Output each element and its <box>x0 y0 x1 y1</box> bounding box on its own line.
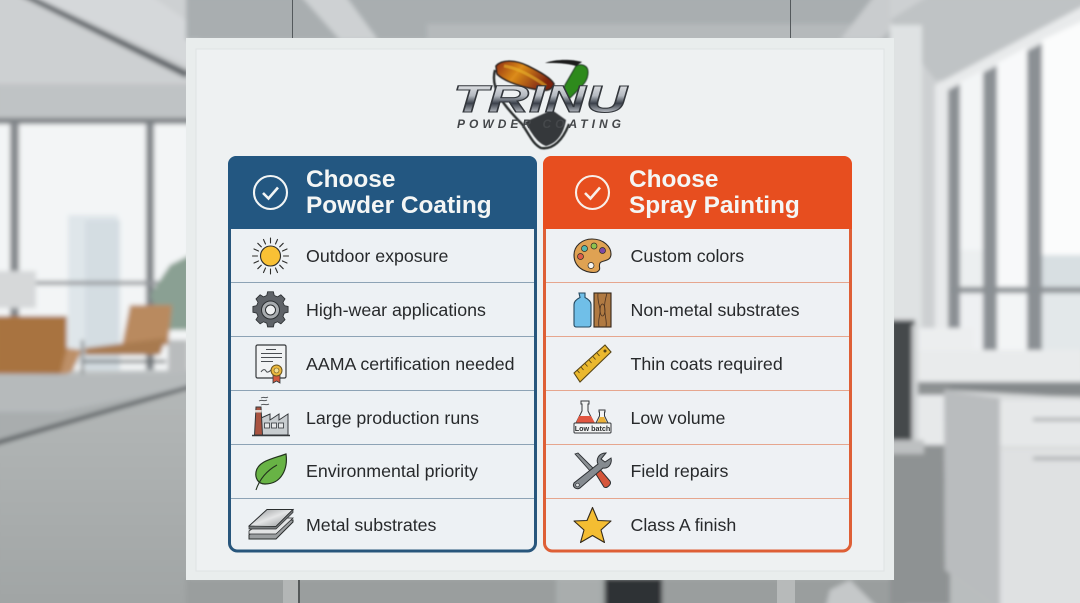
icon: star <box>574 508 611 542</box>
row: environmental priority <box>256 454 478 490</box>
icon: certificate <box>256 345 286 383</box>
header: powder coating <box>228 156 537 229</box>
logo tagline: POWDER COATING <box>457 117 621 131</box>
label: Low volume <box>630 408 725 428</box>
icon: ruler <box>574 345 611 382</box>
label: Field repairs <box>630 461 728 481</box>
label: High-wear applications <box>306 300 486 320</box>
label: Outdoor exposure <box>306 246 448 266</box>
row: non-metal substrates <box>574 293 800 327</box>
logo wordmark: TRINU <box>453 79 629 121</box>
row: custom colors <box>574 239 744 272</box>
row: high-wear applications <box>253 292 486 327</box>
row: AAMA certification needed <box>256 345 515 383</box>
row: metal substrates <box>249 510 437 539</box>
icon: paint palette <box>574 239 611 272</box>
label: Non-metal substrates <box>630 300 800 320</box>
row: outdoor exposure <box>252 238 448 274</box>
label: Metal substrates <box>306 515 437 535</box>
icon: flasks with low batch box <box>574 401 611 433</box>
panel: choose powder coating <box>228 156 537 551</box>
heading: choose powder coating: Powder Coating <box>306 192 492 219</box>
low batch label: Low batch <box>575 424 610 433</box>
icon: check circle <box>576 176 609 209</box>
header: spray painting <box>543 156 852 229</box>
icon: bottle and wood <box>574 293 611 327</box>
icon: check circle <box>254 176 287 209</box>
row: class A finish <box>574 508 736 542</box>
heading: choose powder coating: Choose <box>306 166 395 193</box>
logo emblem <box>494 60 588 148</box>
row dividers <box>546 282 849 498</box>
panel: choose spray painting <box>543 156 852 551</box>
label: Thin coats required <box>630 354 783 374</box>
heading: choose spray painting: Choose <box>629 166 718 193</box>
row: low volume <box>574 401 725 433</box>
sign board <box>186 38 894 580</box>
label: Environmental priority <box>306 461 478 481</box>
icon: factory <box>252 397 290 436</box>
label: AAMA certification needed <box>306 354 515 374</box>
row: large production runs <box>252 397 479 436</box>
row: field repairs <box>573 453 728 489</box>
row dividers <box>231 282 534 498</box>
row: thin coats required <box>574 345 783 382</box>
icon: gear <box>253 292 288 327</box>
icon: metal plates <box>249 510 293 539</box>
label: Class A finish <box>630 515 736 535</box>
heading: choose spray painting: Spray Painting <box>629 192 800 219</box>
label: Large production runs <box>306 408 479 428</box>
icon: sun <box>252 238 288 274</box>
icon: wrench and screwdriver <box>573 453 611 489</box>
icon: leaf <box>256 454 286 490</box>
label: Custom colors <box>630 246 744 266</box>
hanging wires and stand posts <box>283 0 795 603</box>
logo: Trinu Powder Coating <box>453 60 629 148</box>
